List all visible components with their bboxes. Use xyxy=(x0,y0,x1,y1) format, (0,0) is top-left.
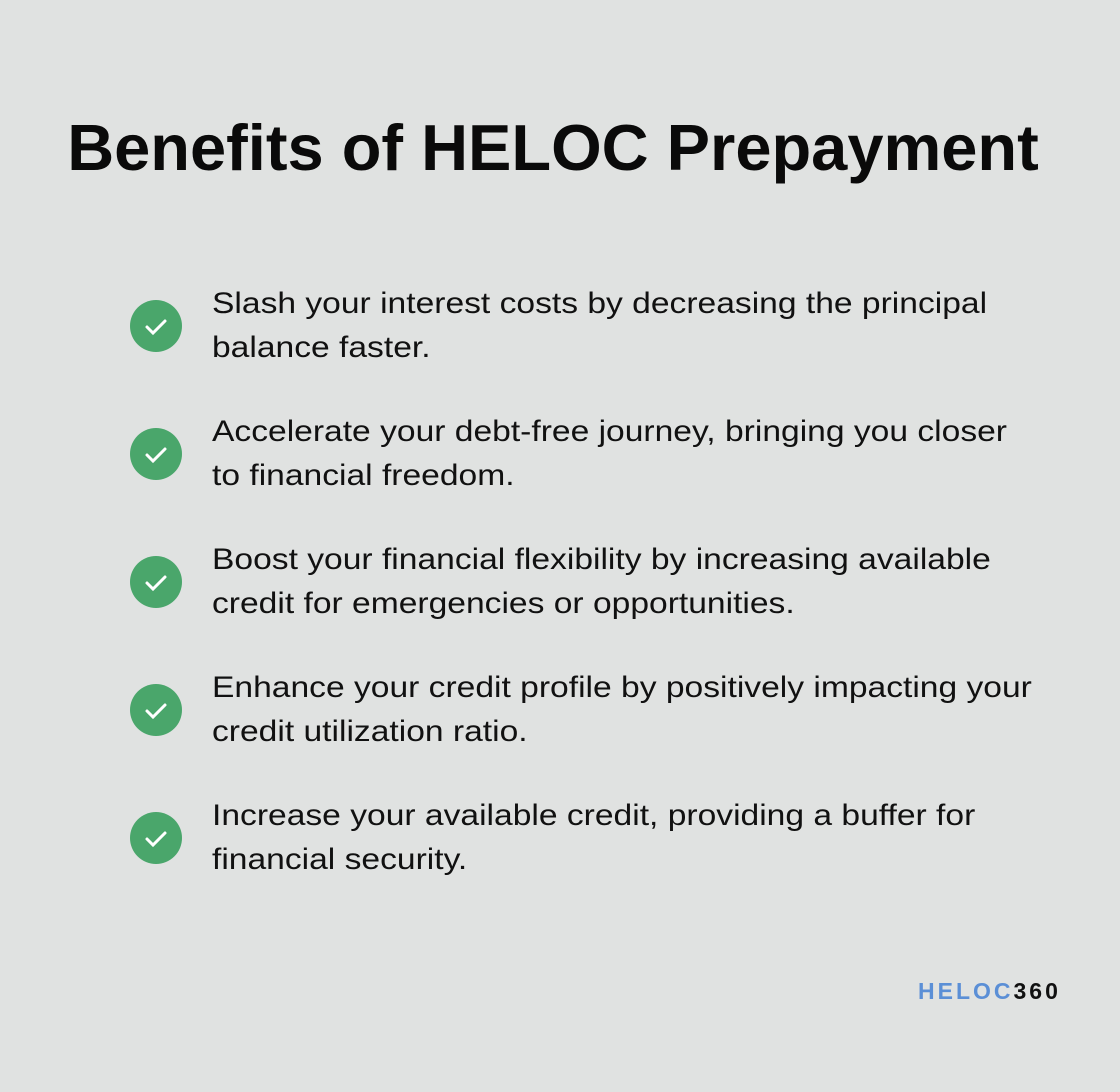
item 5 xyxy=(130,799,975,876)
logo: HELOC360 xyxy=(918,978,1061,1004)
text 5: Increase your available credit, providing a buffer for xyxy=(212,799,975,832)
text 1: balance faster. xyxy=(212,331,431,364)
item 4 xyxy=(130,671,1032,748)
title: Benefits of HELOC Prepayment xyxy=(67,111,1039,184)
icon: check xyxy=(130,812,182,864)
text 4: Enhance your credit profile by positively impacting your xyxy=(212,671,1032,704)
text 4: credit utilization ratio. xyxy=(212,715,528,748)
item 1 xyxy=(130,287,987,364)
text 2 xyxy=(212,415,1007,492)
icon: check xyxy=(130,684,182,736)
text 3: credit for emergencies or opportunities. xyxy=(212,587,795,620)
icon: check xyxy=(130,556,182,608)
text 3: Boost your financial flexibility by increasing available xyxy=(212,543,991,576)
text 1 xyxy=(212,287,987,364)
text 3 xyxy=(212,543,991,620)
item 2 xyxy=(130,415,1007,492)
text 4 xyxy=(212,671,1032,748)
text 1: Slash your interest costs by decreasing the principal xyxy=(212,287,987,320)
item 3 xyxy=(130,543,991,620)
text 2: Accelerate your debt-free journey, bringing you closer xyxy=(212,415,1007,448)
text 5 xyxy=(212,799,975,876)
icon: check xyxy=(130,300,182,352)
icon: check xyxy=(130,428,182,480)
text 2: to financial freedom. xyxy=(212,459,515,492)
text 5: financial security. xyxy=(212,843,467,876)
